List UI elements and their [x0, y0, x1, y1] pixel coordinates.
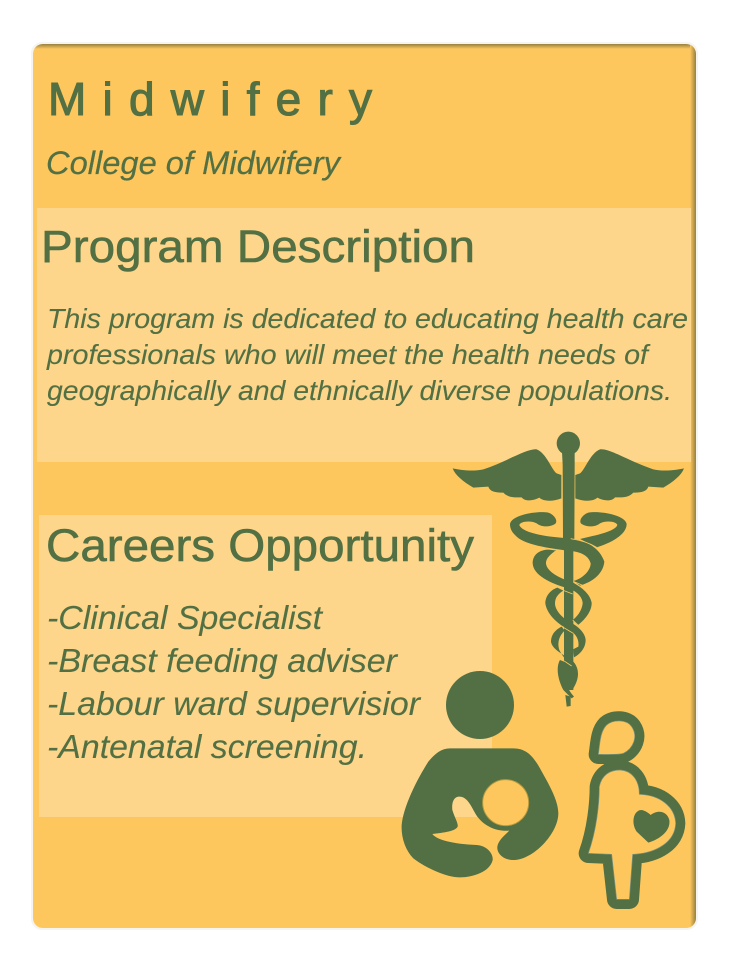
title: Midwifery: [48, 73, 372, 125]
description text: [46, 303, 688, 406]
panel: program description: [37, 208, 691, 462]
icon: pregnant woman: [588, 721, 676, 899]
description text: This program is dedicated to educating health care: [47, 303, 688, 334]
subtitle: College of Midwifery: [46, 145, 342, 181]
icon: breastfeeding mother: [402, 671, 558, 877]
description text: professionals who will meet the health needs of: [46, 339, 651, 370]
heading: careers opportunity: Careers Opportunity: [46, 520, 475, 571]
careers list: -Labour ward supervisior: [47, 685, 422, 722]
careers list: [47, 599, 422, 765]
description text: geographically and ethnically diverse populations.: [47, 375, 672, 406]
panel: careers opportunity: [39, 515, 492, 817]
icon: caduceus: [453, 432, 684, 707]
careers list: -Breast feeding adviser: [47, 642, 399, 679]
careers list: -Antenatal screening.: [47, 728, 367, 765]
careers list: -Clinical Specialist: [47, 599, 324, 636]
heading: program description: Program Description: [41, 221, 475, 272]
